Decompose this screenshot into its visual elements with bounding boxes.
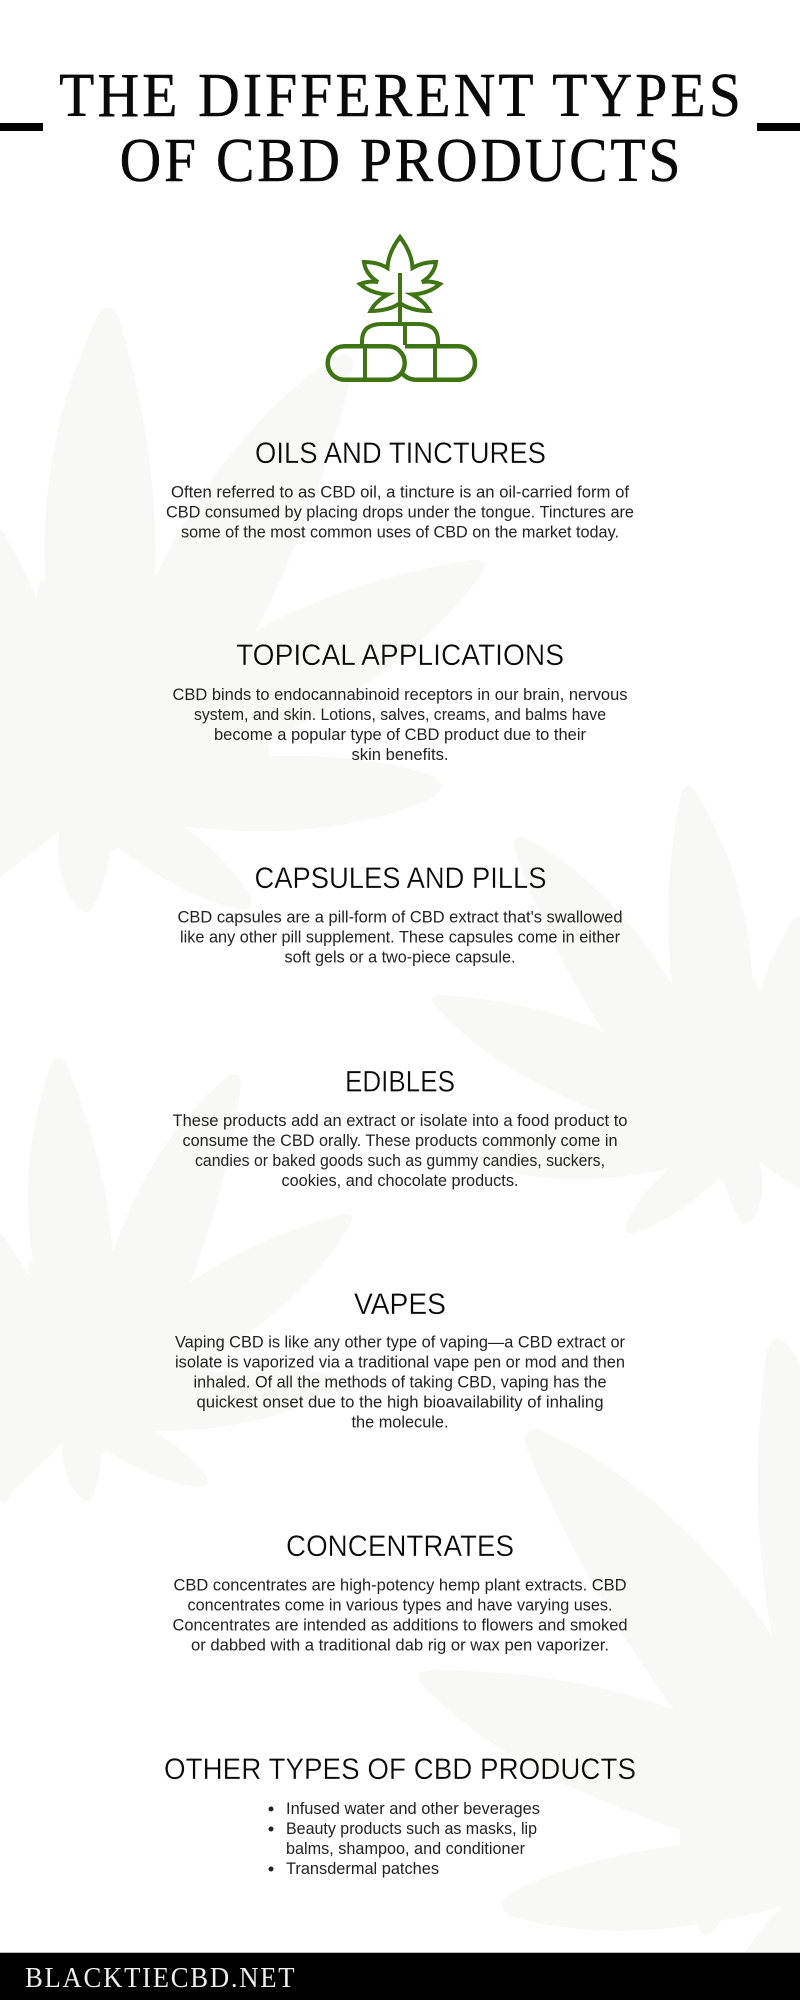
text: vapes description: isolate is vaporized via a traditional vape pen or mod and then (175, 1354, 625, 1372)
title: OF CBD PRODUCTS (120, 126, 680, 194)
text: concentrates description: CBD concentrates are high-potency hemp plant extracts. CBD (174, 1577, 627, 1595)
bullet list: other products: balms, shampoo, and conditioner (286, 1840, 525, 1858)
icon: cannabis leaf above capsules (328, 237, 475, 380)
footer band (0, 1952, 800, 2000)
title bar: left (0, 123, 43, 131)
section: topical applications (172, 639, 628, 764)
text: edibles description (172, 1112, 628, 1190)
text: capsules description: like any other pill supplement. These capsules come in either (180, 929, 620, 947)
text: edibles description: candies or baked goods such as gummy candies, suckers, (195, 1152, 605, 1170)
text: capsules description: soft gels or a two-piece capsule. (284, 949, 516, 967)
text: edibles description: consume the CBD orally. These products commonly come in (182, 1132, 618, 1150)
text: vapes description: inhaled. Of all the methods of taking CBD, vaping has the (194, 1374, 606, 1392)
text: topical description: skin benefits. (352, 746, 448, 764)
text: concentrates description: or dabbed with a traditional dab rig or wax pen vaporizer. (191, 1637, 609, 1655)
text: oils description: Often referred to as CBD oil, a tincture is an oil-carried form of (171, 483, 629, 501)
text: vapes description: the molecule. (352, 1414, 448, 1432)
text: topical description: system, and skin. Lotions, salves, creams, and balms have (194, 706, 606, 724)
bullet list: other products: Transdermal patches (286, 1860, 439, 1878)
heading: concentrates: CONCENTRATES (286, 1530, 514, 1563)
text: vapes description: quickest onset due to the high bioavailability of inhaling (196, 1394, 604, 1412)
text: concentrates description (172, 1577, 628, 1655)
section: other types of cbd products (164, 1753, 636, 1878)
bullet list: other products: Infused water and other beverages (286, 1800, 540, 1818)
bullet list: other products (268, 1800, 540, 1878)
title bar: right (757, 123, 800, 131)
text: topical description: become a popular type of CBD product due to their (214, 726, 587, 744)
text: oils description: CBD consumed by placing drops under the tongue. Tinctures are (166, 503, 634, 521)
text: oils description (166, 483, 634, 541)
background leaf: bottom right (375, 1304, 800, 2000)
background leaf: middle right (414, 772, 800, 1279)
title (59, 61, 741, 194)
heading: topical applications: TOPICAL APPLICATIONS (236, 639, 564, 672)
section: vapes (175, 1288, 625, 1432)
text: edibles description: cookies, and chocolate products. (282, 1172, 518, 1190)
bullet list: other products: Beauty products such as masks, lip (286, 1820, 537, 1838)
title: THE DIFFERENT TYPES (59, 61, 741, 129)
section: oils and tinctures (166, 437, 634, 541)
text: topical description (172, 686, 628, 764)
background leaf: middle left (0, 1029, 382, 1542)
section: edibles (172, 1066, 628, 1190)
heading: oils and tinctures: OILS AND TINCTURES (255, 437, 546, 470)
text: capsules description (178, 909, 622, 967)
section: capsules and pills (178, 862, 622, 967)
text: edibles description: These products add an extract or isolate into a food product to (172, 1112, 628, 1130)
background leaf: top left (0, 308, 485, 950)
heading: other types: OTHER TYPES OF CBD PRODUCTS (164, 1753, 636, 1786)
heading: vapes: VAPES (354, 1288, 446, 1321)
heading: edibles: EDIBLES (345, 1066, 455, 1099)
section: concentrates (172, 1530, 628, 1655)
text: concentrates description: concentrates come in various types and have varying uses. (188, 1597, 612, 1615)
text: topical description: CBD binds to endocannabinoid receptors in our brain, nervous (172, 686, 628, 704)
footer text: website: BLACKTIECBD.NET (25, 1962, 295, 1994)
text: vapes description: Vaping CBD is like any other type of vaping—a CBD extract or (175, 1334, 625, 1352)
heading: capsules and pills: CAPSULES AND PILLS (254, 862, 546, 895)
text: vapes description (175, 1334, 625, 1432)
text: oils description: some of the most common uses of CBD on the market today. (181, 523, 619, 541)
text: concentrates description: Concentrates are intended as additions to flowers and smoked (172, 1617, 628, 1635)
text: capsules description: CBD capsules are a pill-form of CBD extract that's swallowed (178, 909, 622, 927)
